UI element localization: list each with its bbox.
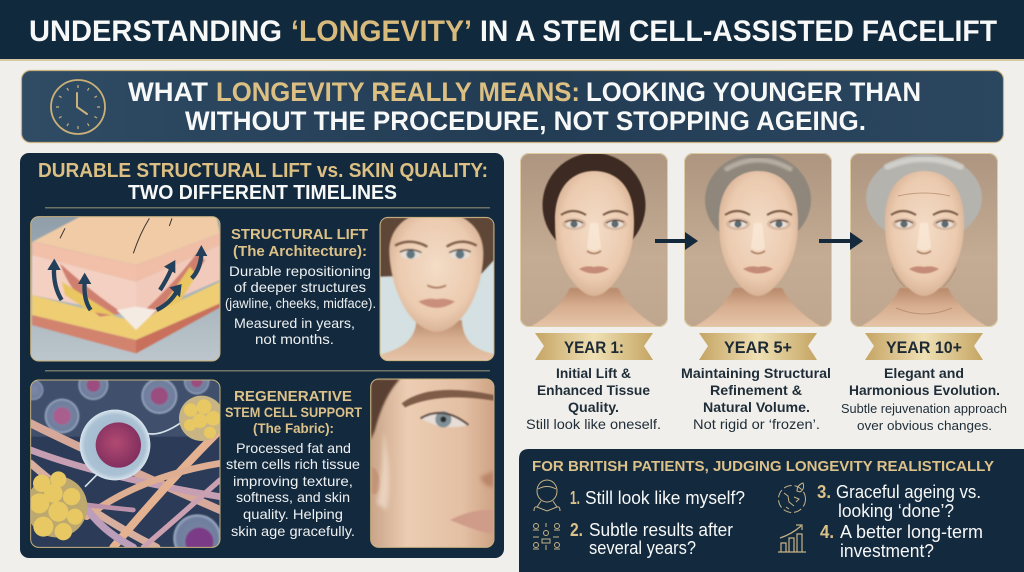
caption: year 10: Subtle rejuvenation approach <box>841 401 1007 416</box>
banner headline: WHAT <box>128 77 208 107</box>
title <box>29 15 997 48</box>
portrait: year 1 <box>520 153 668 327</box>
photo: lifted face <box>380 211 494 361</box>
item 3: 3. <box>817 482 831 502</box>
icon: people network <box>533 523 560 550</box>
caption: year 10: Elegant and <box>884 365 964 381</box>
header bar <box>0 0 1024 61</box>
arrow: year 5 to year 10 <box>819 232 863 250</box>
large stem cell <box>80 410 180 487</box>
banner headline: LOOKING YOUNGER THAN <box>586 77 921 107</box>
text: regenerative stem cell support: quality. Helping <box>243 506 343 522</box>
item 1: 1. <box>570 488 580 508</box>
arrows: tissue lift <box>47 245 207 310</box>
item 1: Still look like myself? <box>585 488 745 508</box>
illustration: skin cross-section <box>31 217 220 361</box>
item 3: Graceful ageing vs. <box>836 482 981 502</box>
caption: year 10 <box>841 365 1007 433</box>
banner: what longevity really means <box>22 70 1004 142</box>
caption: year 1: Quality. <box>568 399 619 415</box>
text: regenerative stem cell support: stem cells rich tissue <box>226 456 360 472</box>
ribbon: year 1 <box>535 333 653 360</box>
item 2: Subtle results after <box>589 520 733 540</box>
caption: year 1: Enhanced Tissue <box>537 382 650 398</box>
text: regenerative stem cell support: improving texture, <box>233 473 353 489</box>
caption: year 1: Initial Lift & <box>556 365 631 381</box>
panel heading <box>38 160 488 204</box>
text: structural lift: Measured in years, <box>234 315 355 331</box>
icon: clock <box>51 80 105 134</box>
panel: for British patients <box>519 449 1024 572</box>
text: structural lift: (jawline, cheeks, midface). <box>225 295 376 311</box>
banner headline <box>128 77 921 136</box>
text: structural lift: (The Architecture): <box>233 243 367 260</box>
text: regenerative stem cell support <box>225 388 362 539</box>
item 2: 2. <box>570 520 583 540</box>
small cells <box>31 380 220 547</box>
caption: year 10: over obvious changes. <box>857 418 992 433</box>
item 4 <box>820 522 983 561</box>
item 3: looking ‘done’? <box>838 501 954 521</box>
title: UNDERSTANDING <box>29 15 282 48</box>
item 2: several years? <box>589 538 696 558</box>
panel heading: FOR BRITISH PATIENTS, JUDGING LONGEVITY REALISTICALLY <box>532 458 994 475</box>
portrait: year 10 <box>850 153 998 327</box>
item 4: A better long-term <box>840 522 983 542</box>
text: regenerative stem cell support: softness, and skin <box>236 489 350 505</box>
icon: person <box>534 480 560 511</box>
text: regenerative stem cell support: (The Fabric): <box>253 420 334 436</box>
banner headline: WITHOUT THE PROCEDURE, NOT STOPPING AGEING. <box>185 106 866 136</box>
caption: year 5: Natural Volume. <box>703 399 810 415</box>
fat clusters <box>26 396 224 540</box>
panel heading: TWO DIFFERENT TIMELINES <box>128 182 397 204</box>
ribbon: year 5: YEAR 5+ <box>724 338 792 357</box>
icon: globe and leaf <box>778 483 806 512</box>
text: regenerative stem cell support: skin age gracefully. <box>231 523 355 539</box>
panel: durable structural lift vs skin quality <box>20 153 504 562</box>
panel: timeline of three portraits <box>520 153 1007 433</box>
ribbon: year 10: YEAR 10+ <box>886 338 962 357</box>
banner headline: LONGEVITY REALLY MEANS: <box>216 77 580 107</box>
icon: growth chart <box>778 525 806 552</box>
text: structural lift: Durable repositioning <box>229 263 371 279</box>
caption: year 5: Not rigid or ‘frozen’. <box>693 416 820 432</box>
text: regenerative stem cell support: REGENERATIVE <box>234 388 352 405</box>
caption: year 5 <box>681 365 831 432</box>
caption: year 10: Harmonious Evolution. <box>849 382 1000 398</box>
text: regenerative stem cell support: STEM CELL SUPPORT <box>225 404 362 420</box>
item 3 <box>817 482 981 521</box>
illustration: stem cells and fat <box>30 380 220 548</box>
photo: skin close-up <box>371 379 494 547</box>
caption: year 5: Refinement & <box>710 382 802 398</box>
arrow: year 1 to year 5 <box>655 232 698 250</box>
caption: year 5: Maintaining Structural <box>681 365 831 381</box>
caption: year 1: Still look like oneself. <box>526 416 661 432</box>
item 4: 4. <box>820 522 834 542</box>
text: structural lift <box>225 226 376 347</box>
text: structural lift: STRUCTURAL LIFT <box>231 226 368 243</box>
ribbon: year 5 <box>699 333 817 360</box>
text: structural lift: of deeper structures <box>234 279 366 295</box>
panel heading: DURABLE STRUCTURAL LIFT vs. SKIN QUALITY: <box>38 160 488 182</box>
text: structural lift: not months. <box>255 331 334 347</box>
ribbon: year 1: YEAR 1: <box>564 338 624 357</box>
item 2 <box>570 520 733 558</box>
item 4: investment? <box>840 541 934 561</box>
caption: year 1 <box>526 365 661 432</box>
portrait: year 5 <box>684 153 832 327</box>
title: ‘LONGEVITY’ <box>291 15 472 48</box>
title: IN A STEM CELL-ASSISTED FACELIFT <box>480 15 997 48</box>
text: regenerative stem cell support: Processed fat and <box>236 440 351 456</box>
ribbon: year 10 <box>865 333 983 360</box>
